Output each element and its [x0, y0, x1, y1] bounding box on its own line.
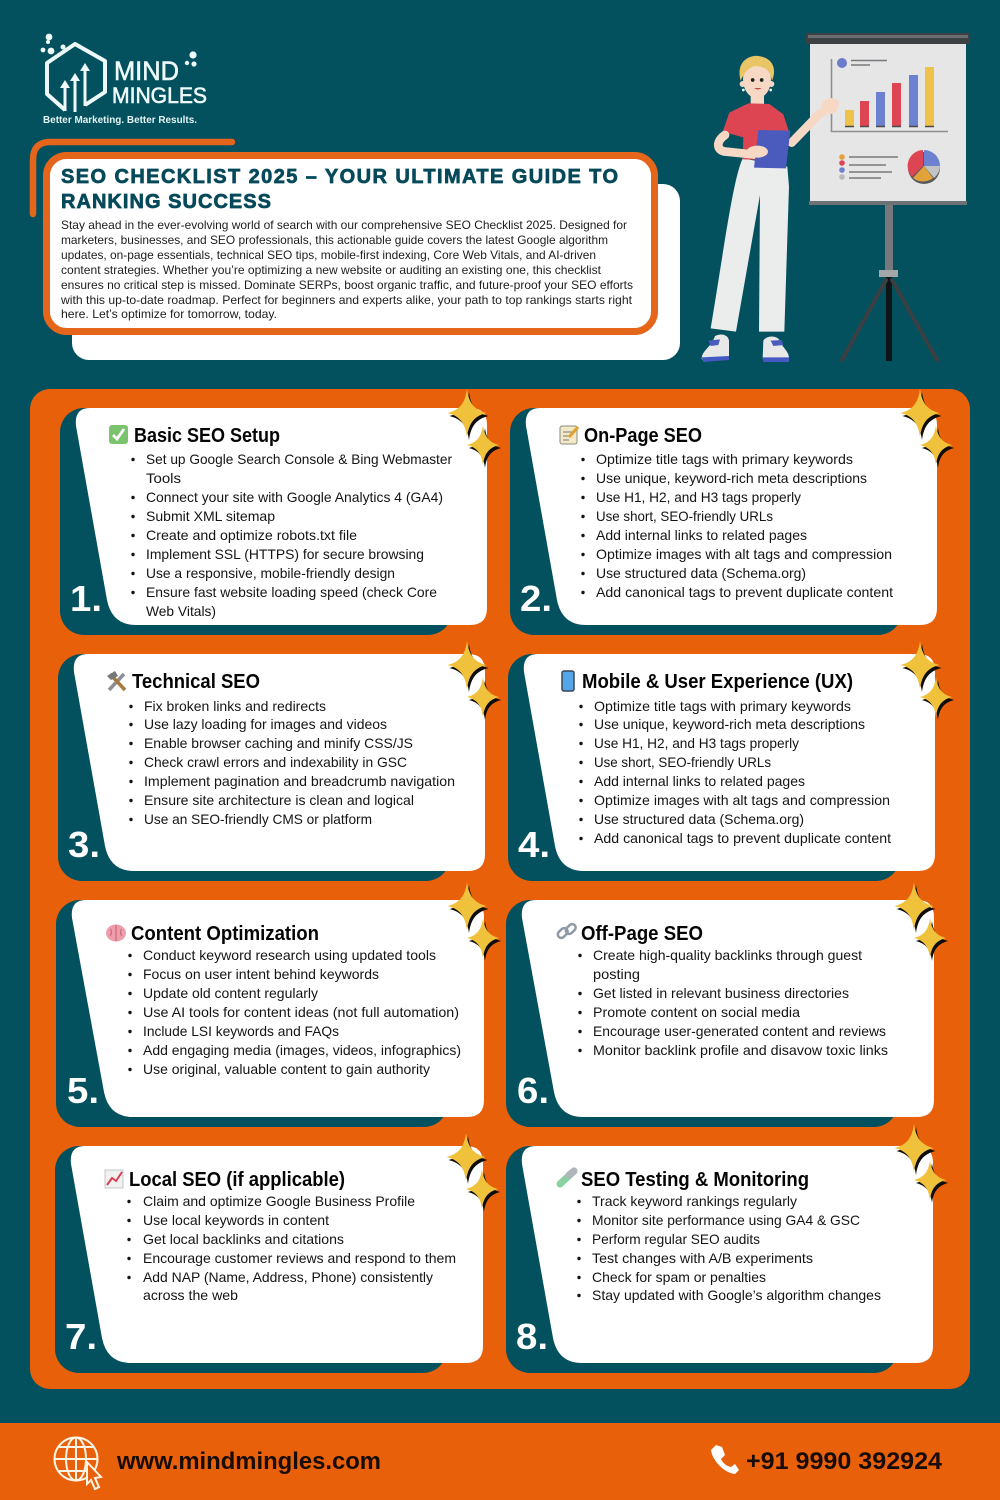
checklist — [129, 698, 455, 827]
number: 4. — [518, 824, 550, 865]
checklist: Track keyword rankings regularly — [592, 1193, 797, 1209]
title: RANKING SUCCESS — [61, 191, 271, 213]
checklist: Add NAP (Name, Address, Phone) consistently — [143, 1269, 433, 1285]
checklist: Claim and optimize Google Business Profile — [143, 1193, 415, 1209]
number: 8. — [516, 1316, 548, 1357]
intro paragraph: with this up-to-date roadmap. Perfect for beginners and experts alike, your path to top rankings starts right — [60, 293, 633, 307]
checklist: Add internal links to related pages — [594, 773, 805, 789]
checklist — [128, 947, 461, 1077]
checklist: Encourage user-generated content and reviews — [593, 1023, 886, 1039]
card 1: Basic SEO Setup — [60, 389, 501, 635]
checklist: Fix broken links and redirects — [144, 698, 326, 714]
number: 1. — [70, 578, 102, 619]
heading: Basic SEO Setup — [134, 425, 280, 447]
checklist: Ensure fast website loading speed (check Core — [146, 584, 437, 600]
checklist: Use structured data (Schema.org) — [596, 565, 806, 581]
checklist — [131, 451, 452, 619]
checklist: Use unique, keyword-rich meta descriptions — [596, 470, 867, 486]
intro paragraph: here. Let’s optimize for tomorrow, today. — [61, 307, 277, 321]
card 8: SEO Testing & Monitoring — [506, 1124, 948, 1373]
card 5: Content Optimization — [56, 882, 501, 1127]
illustration: presenter and chart board — [702, 33, 970, 362]
checklist — [127, 1193, 456, 1303]
checklist: Create high-quality backlinks through guest — [593, 947, 862, 963]
icon: tools — [107, 671, 125, 690]
intro paragraph — [60, 218, 633, 321]
icon: brain — [106, 924, 126, 942]
phone number: +91 9990 392924 — [746, 1448, 943, 1475]
card 3: Technical SEO — [58, 641, 501, 881]
icon: globe with cursor — [54, 1438, 101, 1489]
number: 2. — [520, 578, 552, 619]
number: 7. — [65, 1316, 97, 1357]
checklist: Add internal links to related pages — [596, 527, 807, 543]
checklist: Include LSI keywords and FAQs — [143, 1023, 339, 1039]
intro paragraph: marketers, businesses, and SEO professionals, this actionable guide covers the latest Google algorithm — [61, 233, 608, 247]
checklist: across the web — [143, 1287, 238, 1303]
intro paragraph: updates, on-page essentials, technical SEO tips, mobile-first indexing, Core Web Vitals, and AI-driven — [61, 248, 596, 262]
intro paragraph: content strategies. Whether you’re optimizing a new website or auditing an existing one, this checklist — [61, 263, 602, 277]
presenter figure — [702, 56, 838, 362]
checklist: Perform regular SEO audits — [592, 1231, 760, 1247]
checklist: Promote content on social media — [593, 1004, 800, 1020]
checklist: Add canonical tags to prevent duplicate content — [594, 830, 891, 846]
icon: sparkles — [448, 641, 501, 720]
checklist: Monitor backlink profile and disavow toxic links — [593, 1042, 888, 1058]
checklist: Submit XML sitemap — [146, 508, 275, 524]
card 6: Off-Page SEO — [506, 882, 948, 1127]
checklist: Use short, SEO-friendly URLs — [596, 508, 773, 524]
logo: MIND — [114, 56, 179, 86]
panel: orange checklist background — [30, 389, 970, 1389]
checklist — [579, 698, 891, 846]
checklist: Optimize title tags with primary keywords — [596, 451, 853, 467]
checklist: Add engaging media (images, videos, infographics) — [143, 1042, 461, 1058]
icon: sparkles — [894, 1124, 948, 1203]
checklist: Implement SSL (HTTPS) for secure browsing — [146, 546, 424, 562]
icon: sparkles — [448, 882, 501, 961]
heading: Mobile & User Experience (UX) — [582, 671, 853, 693]
checklist: Use lazy loading for images and videos — [144, 716, 387, 732]
checklist: Focus on user intent behind keywords — [143, 966, 379, 982]
title: SEO CHECKLIST 2025 – YOUR ULTIMATE GUIDE TO — [61, 166, 618, 188]
checklist: Check crawl errors and indexability in GSC — [144, 754, 407, 770]
logo — [41, 34, 207, 126]
icon: green check — [109, 425, 128, 444]
checklist: Enable browser caching and minify CSS/JS — [144, 735, 413, 751]
number: 6. — [517, 1070, 549, 1111]
checklist: Use H1, H2, and H3 tags properly — [594, 735, 799, 751]
checklist: Use H1, H2, and H3 tags properly — [596, 489, 801, 505]
checklist: Connect your site with Google Analytics 4 (GA4) — [146, 489, 443, 505]
heading: On-Page SEO — [584, 425, 702, 447]
checklist — [577, 1193, 881, 1303]
checklist: Check for spam or penalties — [592, 1269, 766, 1285]
checklist: Set up Google Search Console & Bing Webmaster — [146, 451, 452, 467]
checklist: Use local keywords in content — [143, 1212, 329, 1228]
icon: chart — [105, 1170, 123, 1188]
card 7: Local SEO — [55, 1133, 500, 1373]
checklist: Optimize images with alt tags and compression — [594, 792, 890, 808]
checklist: Stay updated with Google’s algorithm changes — [592, 1287, 881, 1303]
number: 5. — [67, 1070, 99, 1111]
checklist: Test changes with A/B experiments — [592, 1250, 813, 1266]
footer — [0, 1423, 1000, 1500]
checklist: Use original, valuable content to gain authority — [143, 1061, 430, 1077]
checklist: Use short, SEO-friendly URLs — [594, 754, 771, 770]
checklist: Get local backlinks and citations — [143, 1231, 344, 1247]
checklist: Get listed in relevant business directories — [593, 985, 849, 1001]
chart board — [806, 33, 970, 361]
icon: memo — [560, 426, 578, 444]
checklist: Update old content regularly — [143, 985, 318, 1001]
icon: sparkles — [894, 882, 948, 961]
number: 3. — [68, 824, 100, 865]
checklist: Use unique, keyword-rich meta descriptions — [594, 716, 865, 732]
checklist: Web Vitals) — [146, 603, 216, 619]
icon: sparkles — [900, 641, 954, 720]
logo: Better Marketing. Better Results. — [43, 114, 197, 126]
checklist: Use an SEO-friendly CMS or platform — [144, 811, 372, 827]
logo: MINGLES — [112, 83, 207, 108]
checklist: Add canonical tags to prevent duplicate content — [596, 584, 893, 600]
checklist — [581, 451, 893, 600]
intro paragraph: Stay ahead in the ever-evolving world of search with our comprehensive SEO Checklist 2025. Designed for — [61, 218, 627, 232]
icon: phone handset — [711, 1445, 739, 1474]
icon: sparkles — [900, 389, 954, 468]
checklist: Conduct keyword research using updated tools — [143, 947, 436, 963]
heading: Off-Page SEO — [581, 923, 703, 945]
heading: SEO Testing & Monitoring — [581, 1169, 809, 1191]
icon: link — [556, 923, 577, 939]
heading: Content Optimization — [131, 923, 319, 945]
heading: Local SEO (if applicable) — [129, 1169, 345, 1191]
icon: sparkles — [448, 389, 501, 468]
icon: sparkles — [446, 1133, 500, 1212]
checklist: Encourage customer reviews and respond to them — [143, 1250, 456, 1266]
title — [61, 166, 618, 213]
checklist: Monitor site performance using GA4 & GSC — [592, 1212, 860, 1228]
card 4: Mobile & User Experience — [508, 641, 954, 881]
checklist: Use structured data (Schema.org) — [594, 811, 804, 827]
checklist: Use AI tools for content ideas (not full automation) — [143, 1004, 459, 1020]
icon: phone — [562, 671, 574, 691]
website: www.mindmingles.com — [116, 1448, 381, 1475]
checklist: Optimize title tags with primary keywords — [594, 698, 851, 714]
checklist: Create and optimize robots.txt file — [146, 527, 357, 543]
icon: test tube — [560, 1171, 574, 1184]
checklist: Optimize images with alt tags and compression — [596, 546, 892, 562]
checklist: posting — [593, 966, 640, 982]
intro panel — [33, 142, 680, 360]
checklist: Ensure site architecture is clean and logical — [144, 792, 414, 808]
intro paragraph: ensures no critical step is missed. Dominate SERPs, boost organic traffic, and future-proof your SEO efforts — [61, 278, 633, 292]
card 2: On-Page SEO — [510, 389, 954, 635]
checklist: Tools — [146, 470, 181, 486]
checklist — [578, 947, 888, 1058]
checklist: Implement pagination and breadcrumb navigation — [144, 773, 455, 789]
heading: Technical SEO — [132, 671, 260, 693]
checklist: Use a responsive, mobile-friendly design — [146, 565, 395, 581]
